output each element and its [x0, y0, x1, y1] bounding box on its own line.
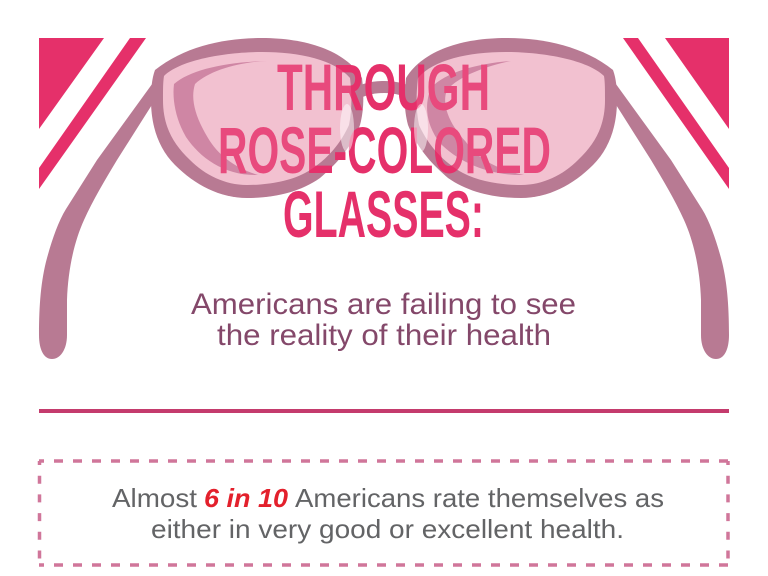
callout text: Almost [112, 483, 198, 513]
callout text: Americans rate themselves as [295, 483, 664, 513]
right temple arm [613, 80, 729, 359]
title: GLASSES: [283, 177, 484, 251]
lens sheen over title [163, 52, 605, 185]
subtitle: Americans are failing to see [191, 288, 576, 321]
left lens [163, 52, 351, 185]
callout text [112, 483, 664, 544]
icon: rose-colored glasses [39, 38, 729, 359]
left lens reflection [174, 61, 267, 175]
title: THROUGH [277, 50, 490, 124]
left temple arm [39, 80, 155, 359]
right lens reflection [427, 61, 524, 175]
subtitle [191, 288, 576, 352]
callout text: either in very good or excellent health. [151, 514, 624, 544]
right corner decoration [623, 38, 729, 189]
left frame [151, 38, 363, 198]
divider rule [39, 409, 729, 413]
subtitle: the reality of their health [217, 319, 551, 352]
bridge [352, 87, 416, 96]
right lens [417, 52, 605, 185]
callout text: 6 in 10 [204, 483, 289, 513]
title: ROSE-COLORED [218, 113, 551, 187]
left corner decoration [39, 38, 146, 189]
title [218, 50, 551, 251]
right frame [405, 38, 617, 198]
callout: dashed box [39, 461, 729, 566]
